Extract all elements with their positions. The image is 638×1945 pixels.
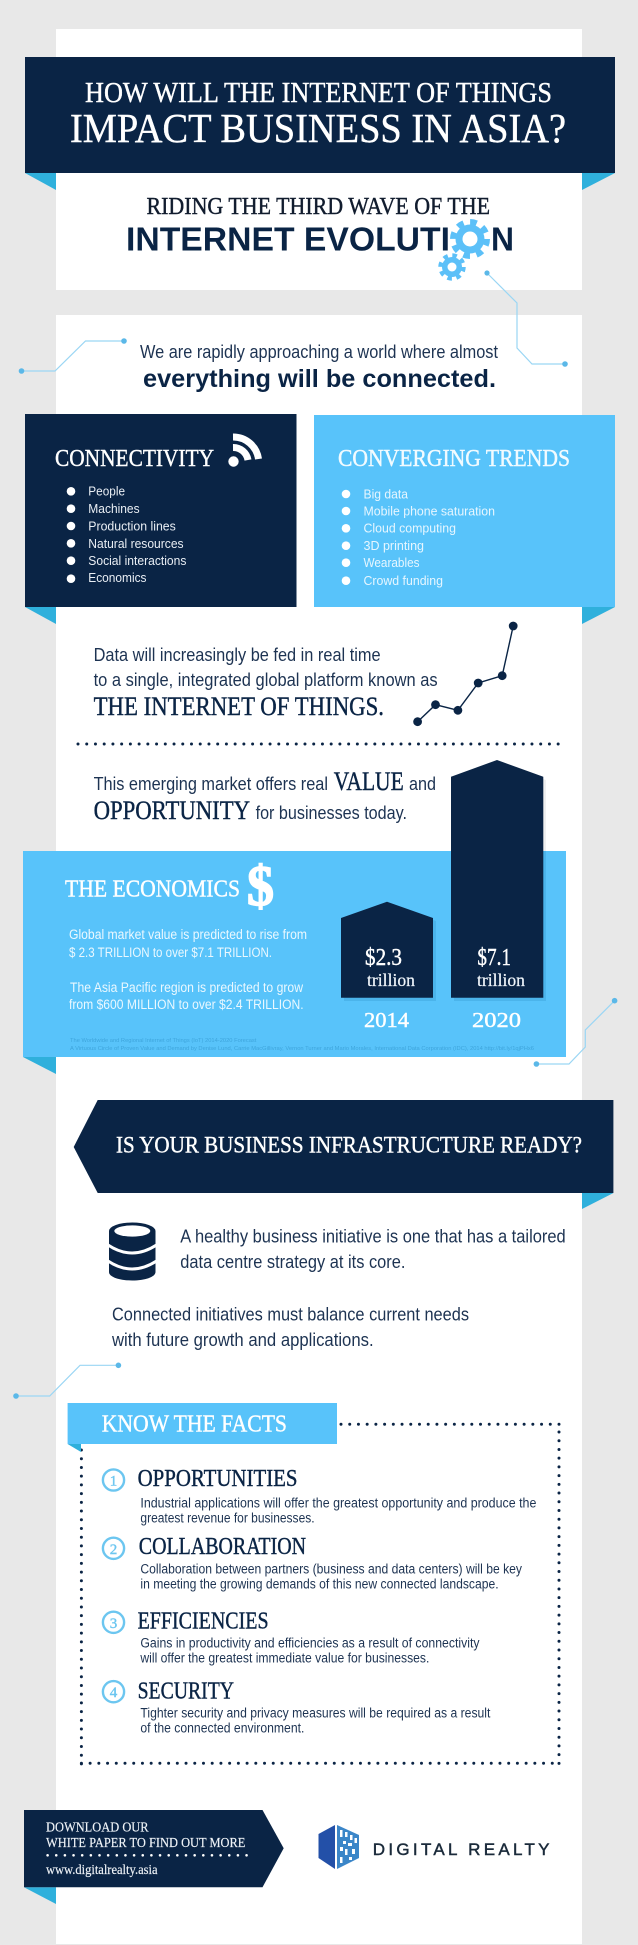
fact 1: opportunities: Industrial applications will offer the greatest opportunity and produce the <box>140 1495 536 1510</box>
list: connectivity items <box>67 484 187 585</box>
list: connectivity items: Economics <box>88 570 147 585</box>
intro text: We are rapidly approaching a world where almost <box>140 342 498 362</box>
icon: dollar sign: $ <box>247 855 274 918</box>
call to action: download white paper: www.digitalrealty.asia <box>46 1862 158 1877</box>
fact 4: security: of the connected environment. <box>140 1720 304 1735</box>
fact 4: security: Tighter security and privacy measures will be required as a result <box>140 1705 491 1720</box>
bar: 2020: trillion <box>477 970 525 990</box>
text block: value and opportunity: OPPORTUNITY <box>94 796 250 825</box>
fact 2: collaboration <box>103 1534 522 1591</box>
text: sources: The Worldwide and Regional Internet of Things (IoT) 2014-2020 Forecast <box>70 1038 257 1044</box>
fact 4: security <box>103 1678 491 1735</box>
panel: the economics <box>23 851 566 1074</box>
list: trend items: Wearables <box>364 555 420 570</box>
subtitle: riding the third wave <box>126 194 514 258</box>
text block: connected initiatives <box>111 1305 469 1350</box>
intro text: everything will be connected. <box>143 365 496 393</box>
subtitle: riding the third wave: RIDING THE THIRD WAVE OF THE <box>146 194 490 220</box>
list: trend items: 3D printing <box>364 538 424 553</box>
text: market figures: The Asia Pacific region is predicted to grow <box>70 980 303 995</box>
connector: top left <box>19 338 127 374</box>
chart: rising line <box>413 622 518 726</box>
text block: data centre strategy <box>180 1227 566 1272</box>
bar: 2014: 2014 <box>364 1008 410 1032</box>
title banner: HOW WILL THE INTERNET OF THINGS <box>85 77 552 109</box>
list: connectivity items: Natural resources <box>88 536 184 551</box>
call to action: download white paper <box>24 1810 284 1904</box>
text block: internet of things: to a single, integrated global platform known as <box>94 670 438 690</box>
text: market figures: $ 2.3 TRILLION to over $7.1 TRILLION. <box>69 945 272 960</box>
text block: internet of things <box>94 645 438 721</box>
text block: data centre strategy: data centre strategy at its core. <box>180 1252 405 1272</box>
heading: the economics: THE ECONOMICS <box>65 877 240 903</box>
panel: connectivity: CONNECTIVITY <box>55 446 214 472</box>
icon: logo mark <box>318 1825 359 1869</box>
connector: top right <box>484 270 568 367</box>
fact 2: collaboration: Collaboration between partners (business and data centers) will be key <box>140 1561 522 1576</box>
banner: infrastructure ready <box>74 1100 613 1209</box>
fact 1: opportunities <box>103 1466 536 1525</box>
text block: internet of things: THE INTERNET OF THINGS. <box>94 692 384 721</box>
call to action: download white paper: DOWNLOAD OUR <box>46 1821 149 1836</box>
title banner <box>25 57 615 190</box>
text: market figures: from $600 MILLION to over $2.4 TRILLION. <box>69 997 304 1012</box>
bar: 2014 <box>341 902 436 1032</box>
subtitle: riding the third wave: INTERNET EVOLUTI <box>126 220 450 258</box>
panel: converging trends: CONVERGING TRENDS <box>338 446 570 472</box>
intro text <box>140 342 498 393</box>
list: trend items: Mobile phone saturation <box>364 504 495 518</box>
fact 2: collaboration: in meeting the growing demands of this new connected landscape. <box>140 1576 499 1591</box>
text block: internet of things: Data will increasingly be fed in real time <box>94 645 381 665</box>
icon: wifi signal <box>228 437 258 467</box>
fact 3: efficiencies: EFFICIENCIES <box>138 1608 269 1634</box>
text block: data centre strategy: A healthy business initiative is one that has a tailored <box>180 1227 566 1247</box>
text: market figures: Global market value is predicted to rise from <box>69 927 307 942</box>
title banner: IMPACT BUSINESS IN ASIA? <box>70 105 566 151</box>
connector: lower left <box>13 1362 121 1399</box>
fact 4: security: SECURITY <box>138 1678 234 1704</box>
panel: converging trends <box>314 415 615 624</box>
text: sources: A Virtuous Circle of Proven Value and Demand by Denise Lund, Carrie MacGillivray, Vernon Turner and Mario Morales, International Data Corporation (IDC), 2014 http://bit.ly/1qjPHx6 <box>70 1046 534 1052</box>
list: trend items: Cloud computing <box>364 520 456 536</box>
fact 4: security: 4 <box>110 1685 118 1701</box>
subtitle: riding the third wave: N <box>491 220 514 258</box>
bar: 2014: trillion <box>367 970 415 990</box>
icon: gears <box>440 222 487 278</box>
fact 2: collaboration: 2 <box>110 1542 117 1558</box>
fact 1: opportunities: OPPORTUNITIES <box>138 1466 298 1492</box>
list: trend items <box>342 486 495 588</box>
panel: connectivity <box>25 414 296 624</box>
logo: digital realty: DIGITAL REALTY <box>373 1840 550 1859</box>
bar: 2020: 2020 <box>472 1008 521 1032</box>
list: trend items: Big data <box>364 486 409 502</box>
logo: digital realty <box>318 1825 550 1869</box>
text block: connected initiatives: Connected initiatives must balance current needs <box>112 1305 469 1325</box>
bar: 2020: $7.1 <box>477 945 511 971</box>
icon: database <box>108 1222 156 1280</box>
text: sources <box>70 1038 534 1052</box>
banner: infrastructure ready: IS YOUR BUSINESS INFRASTRUCTURE READY? <box>116 1133 582 1159</box>
fact 3: efficiencies <box>103 1608 480 1665</box>
call to action: download white paper: WHITE PAPER TO FIND OUT MORE <box>46 1836 245 1851</box>
text: market figures <box>69 927 307 1012</box>
fact 1: opportunities: 1 <box>110 1474 117 1490</box>
fact 3: efficiencies: 3 <box>110 1616 117 1632</box>
fact 1: opportunities: greatest revenue for businesses. <box>140 1510 315 1525</box>
list: connectivity items: Production lines <box>88 518 176 533</box>
list: connectivity items: Social interactions <box>88 553 187 568</box>
bar: 2014: $2.3 <box>365 945 402 971</box>
list: connectivity items: Machines <box>88 501 140 516</box>
text block: value and opportunity: for businesses today. <box>256 803 407 823</box>
fact 2: collaboration: COLLABORATION <box>139 1534 306 1560</box>
text block: value and opportunity <box>94 767 436 825</box>
fact 3: efficiencies: will offer the greatest immediate value for businesses. <box>139 1650 429 1665</box>
heading: know the facts <box>68 1403 337 1452</box>
text block: value and opportunity: and <box>409 774 436 794</box>
bar: 2020 <box>451 760 546 1032</box>
text block: value and opportunity: This emerging market offers real <box>94 774 328 794</box>
text block: value and opportunity: VALUE <box>334 767 404 796</box>
panel: know the facts frame <box>81 1424 560 1764</box>
list: trend items: Crowd funding <box>364 573 443 588</box>
text block: connected initiatives: with future growth and applications. <box>111 1330 374 1350</box>
list: connectivity items: People <box>88 484 125 498</box>
heading: know the facts: KNOW THE FACTS <box>102 1412 287 1438</box>
connector: middle right <box>534 998 617 1067</box>
fact 3: efficiencies: Gains in productivity and efficiencies as a result of connectivity <box>140 1635 480 1650</box>
